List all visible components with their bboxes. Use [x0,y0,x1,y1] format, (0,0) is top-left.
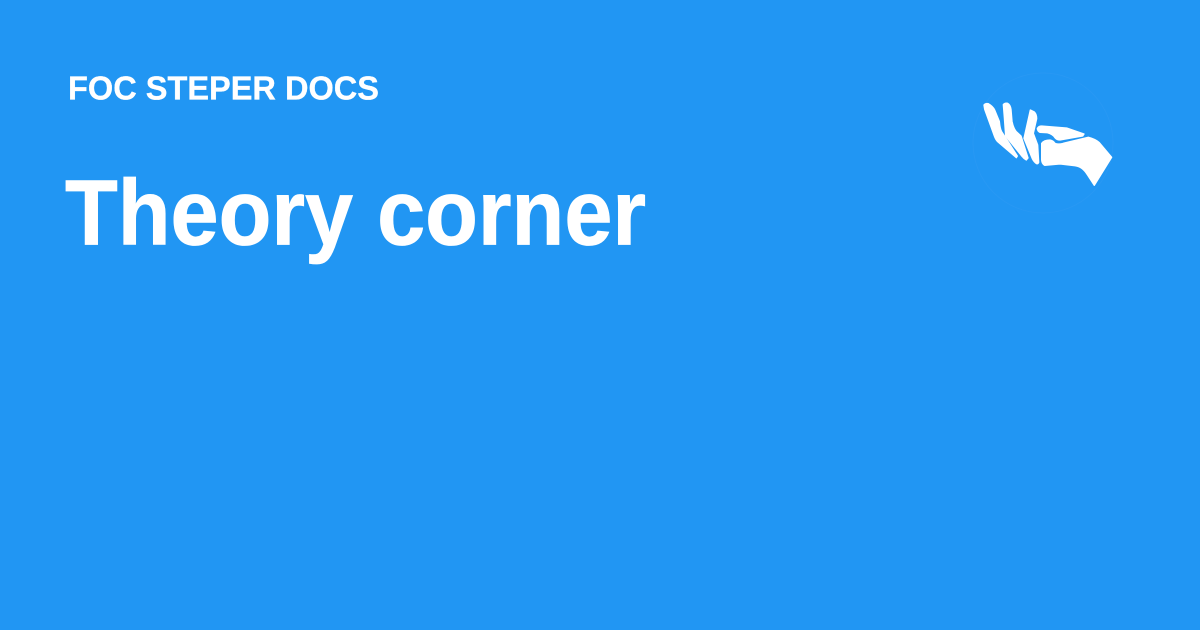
site name heading: FOC STEPER DOCS [68,70,379,106]
page title: Theory corner [65,160,646,264]
icon: hand logo [973,73,1113,213]
